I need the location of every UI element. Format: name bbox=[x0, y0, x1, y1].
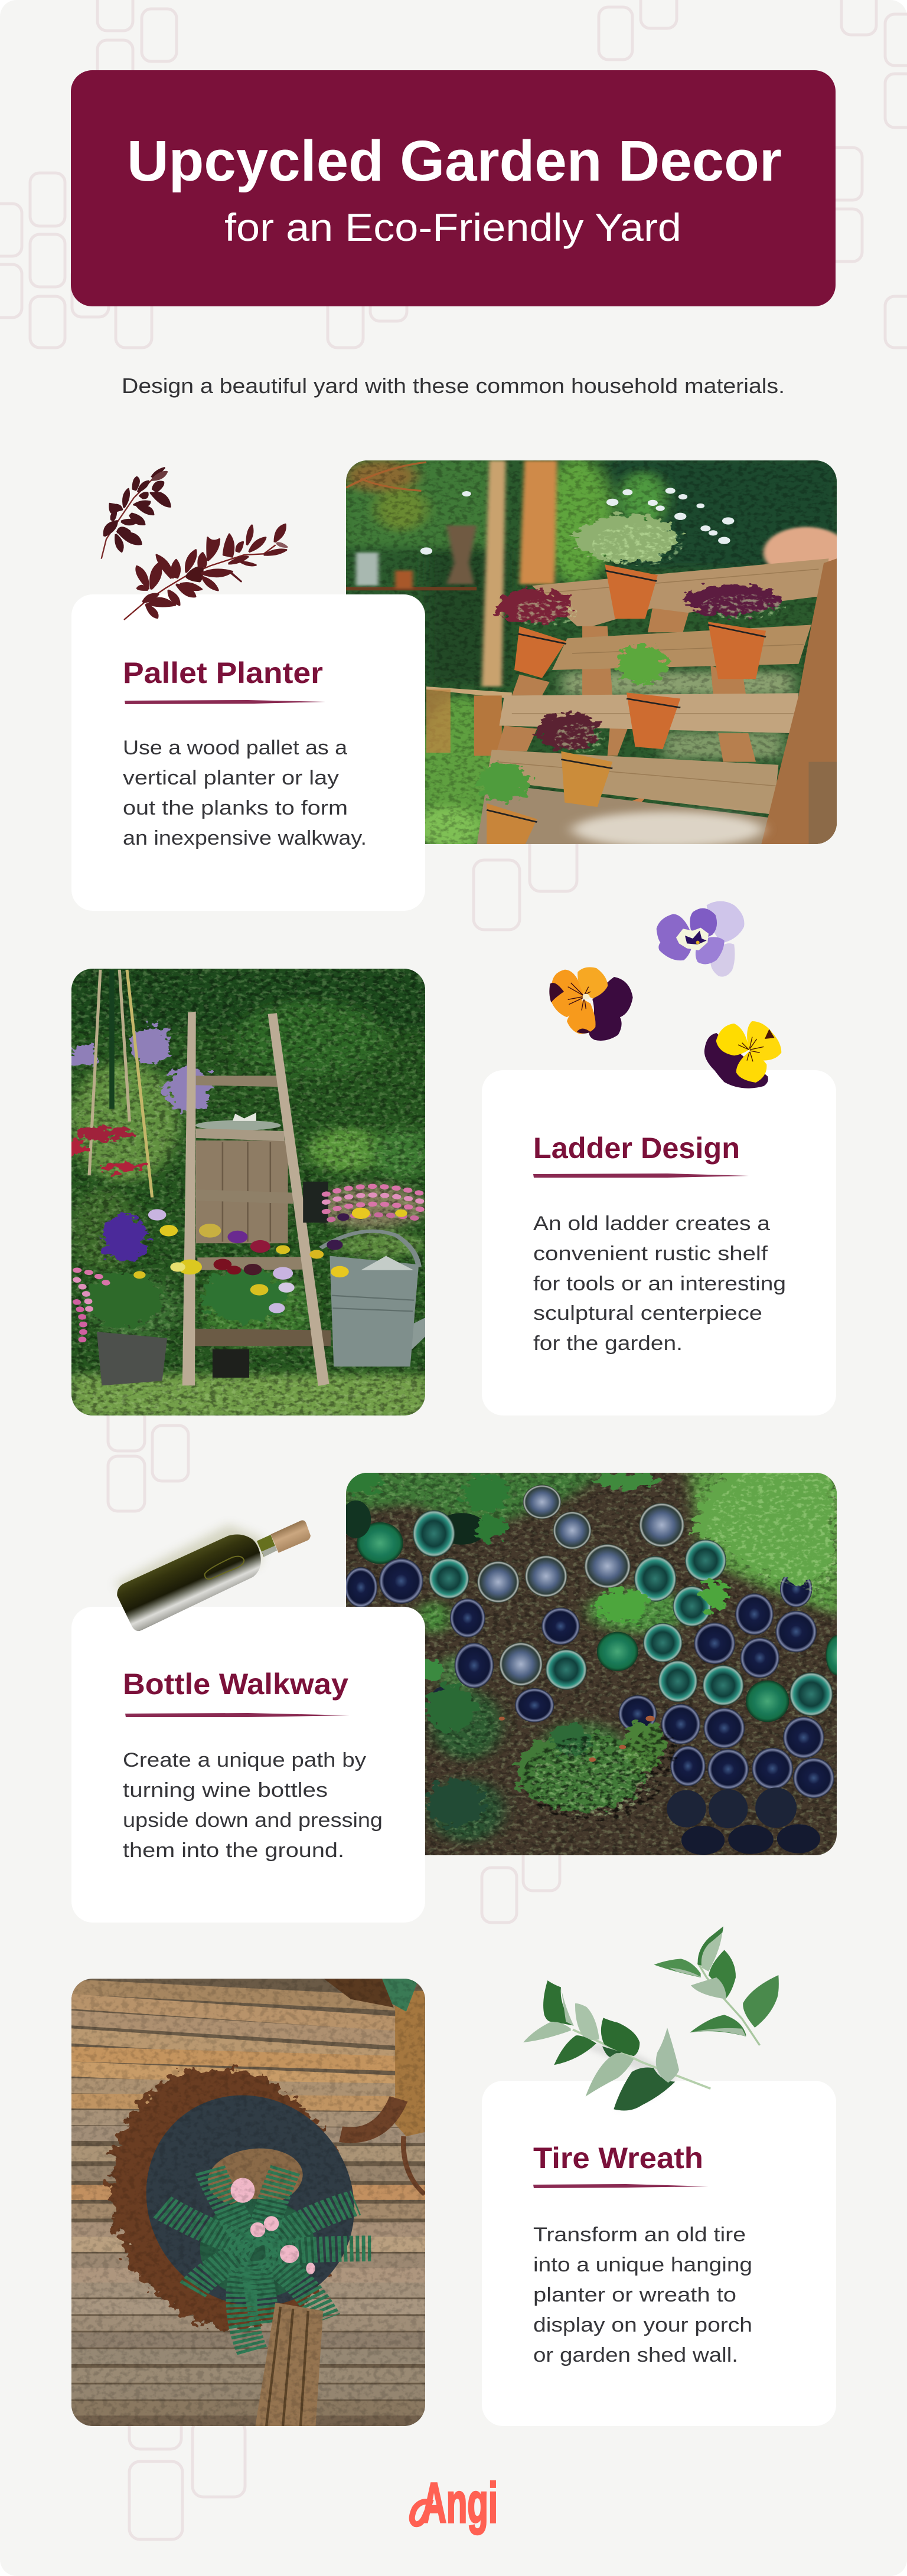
intro text: Design a beautiful yard with these common household materials. bbox=[122, 374, 785, 398]
photo: bottle walkway bbox=[337, 1462, 850, 1859]
title banner bbox=[71, 70, 836, 306]
heading: Pallet Planter bbox=[123, 656, 323, 689]
body text: Create a unique path by bbox=[123, 1749, 366, 1771]
body text: for the garden. bbox=[533, 1332, 683, 1355]
body text: out the planks to form bbox=[123, 797, 348, 819]
body text bbox=[533, 2224, 752, 2366]
body text: An old ladder creates a bbox=[533, 1212, 770, 1235]
body text: convenient rustic shelf bbox=[533, 1243, 768, 1265]
body text: an inexpensive walkway. bbox=[123, 827, 367, 849]
logo: Angi bbox=[412, 2472, 498, 2535]
photo: ladder garden bbox=[62, 966, 431, 1419]
body text: Transform an old tire bbox=[533, 2224, 746, 2246]
photo: tire wreath bbox=[69, 1976, 429, 2429]
heading: Ladder Design bbox=[533, 1132, 740, 1165]
body text: for tools or an interesting bbox=[533, 1273, 786, 1295]
card: bottle walkway bbox=[71, 1607, 425, 1923]
icon: orange pansy bbox=[549, 967, 633, 1041]
card: pallet planter bbox=[71, 594, 425, 911]
body text bbox=[123, 1749, 383, 1862]
photo: pallet planter bbox=[341, 457, 849, 852]
brush underline bbox=[125, 700, 325, 704]
icon: wine bottle bbox=[114, 1521, 311, 1631]
card: ladder design bbox=[482, 1070, 836, 1416]
body text: planter or wreath to bbox=[533, 2284, 736, 2306]
body text: into a unique hanging bbox=[533, 2254, 752, 2276]
subtitle: for an Eco-Friendly Yard bbox=[224, 205, 681, 249]
body text: them into the ground. bbox=[123, 1839, 344, 1862]
body text: turning wine bottles bbox=[123, 1779, 328, 1802]
icon: purple pansy bbox=[657, 901, 744, 977]
body text: or garden shed wall. bbox=[533, 2344, 738, 2366]
heading: Tire Wreath bbox=[533, 2142, 703, 2175]
body text: upside down and pressing bbox=[123, 1809, 383, 1832]
brush underline bbox=[533, 1173, 749, 1178]
logo: Angi: Angi bbox=[422, 2472, 498, 2535]
body text: vertical planter or lay bbox=[123, 767, 339, 789]
body text bbox=[533, 1212, 786, 1355]
body text bbox=[123, 737, 367, 849]
body text: sculptural centerpiece bbox=[533, 1302, 762, 1325]
icon: pansies bbox=[549, 901, 781, 1088]
body text: display on your porch bbox=[533, 2314, 752, 2336]
body text: Use a wood pallet as a bbox=[123, 737, 347, 759]
heading: Bottle Walkway bbox=[123, 1668, 348, 1701]
brush underline bbox=[125, 1713, 350, 1717]
brush underline bbox=[533, 2184, 709, 2188]
title: Upcycled Garden Decor bbox=[127, 129, 782, 193]
icon: red-leaf branches bbox=[102, 468, 287, 620]
card: tire wreath bbox=[482, 2081, 836, 2426]
icon: yellow pansy bbox=[704, 1021, 781, 1088]
icon: green leaf sprigs bbox=[523, 1926, 779, 2111]
